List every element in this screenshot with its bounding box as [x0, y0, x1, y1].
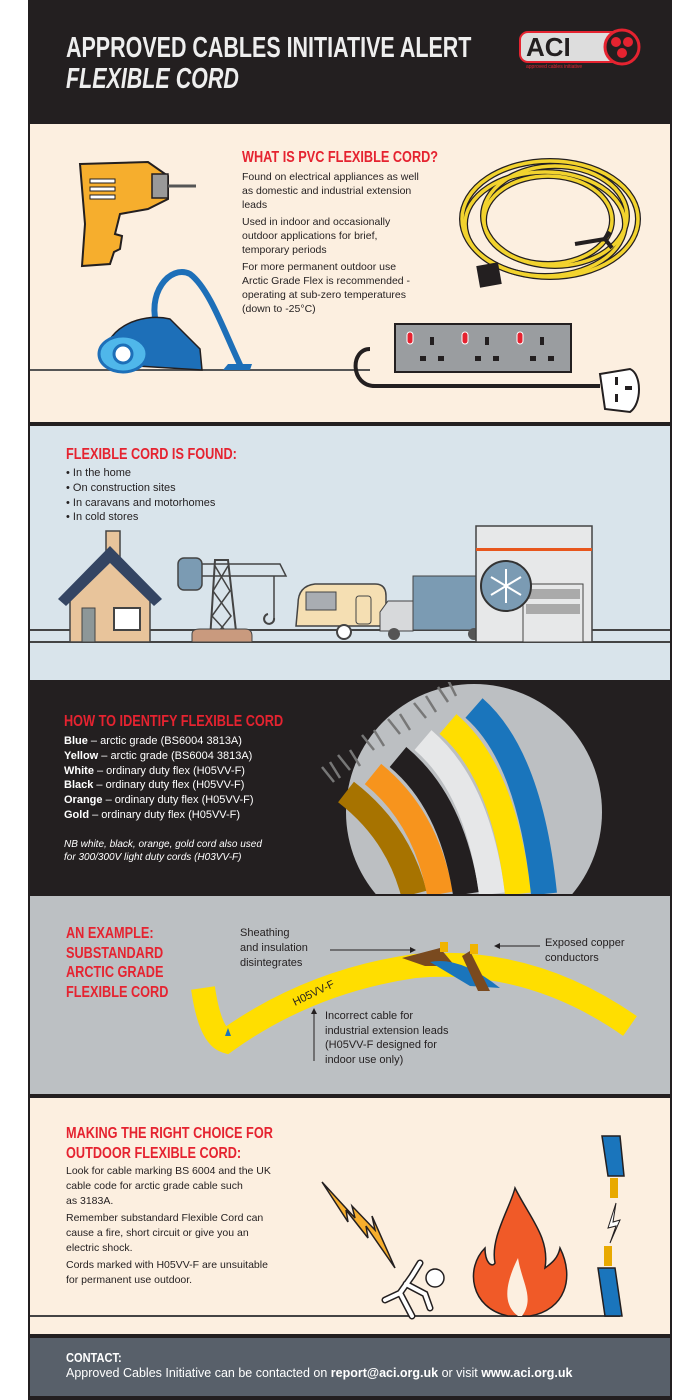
label: incorrect cable: industrial extension leads — [325, 1024, 449, 1036]
label: incorrect cable: indoor use only) — [325, 1054, 403, 1066]
header — [28, 0, 672, 122]
body text — [242, 171, 419, 315]
heading: MAKING THE RIGHT CHOICE FOR — [66, 1125, 273, 1142]
icons: shock, fire, cable — [30, 1135, 625, 1320]
heading — [66, 925, 168, 1000]
contact heading: CONTACT: — [66, 1350, 122, 1365]
label: exposed copper: conductors — [545, 952, 599, 964]
label: incorrect cable — [325, 1010, 449, 1066]
panel: what is pvc flexible cord — [28, 122, 672, 424]
note: NB white, black, orange, gold cord also used — [64, 839, 262, 850]
heading: FLEXIBLE CORD IS FOUND: — [66, 446, 237, 463]
title: APPROVED CABLES INITIATIVE ALERT — [66, 32, 471, 64]
body text: as 3183A. Remember substandard Flexible Cord can — [66, 1195, 263, 1224]
illustration: locations — [30, 525, 670, 643]
body text: electric shock. Cords marked with H05VV-F are unsuitable — [66, 1242, 268, 1271]
colour list: Orange – ordinary duty flex (H05VV-F) — [64, 794, 254, 806]
panel: contact — [28, 1336, 672, 1398]
label: sheathing — [240, 927, 308, 969]
label: sheathing: and insulation — [240, 942, 308, 954]
title: FLEXIBLE CORD — [66, 63, 239, 95]
bullet list: • In cold stores — [66, 511, 138, 523]
bullet list: • In caravans and motorhomes — [66, 497, 215, 509]
colour list: Yellow – arctic grade (BS6004 3813A) — [64, 750, 252, 762]
panel: how to identify — [28, 682, 672, 894]
colour list: White – ordinary duty flex (H05VV-F) — [64, 765, 245, 777]
panel: an example — [28, 894, 672, 1096]
body text: Look for cable marking BS 6004 and the UK — [66, 1165, 271, 1177]
body text: temporary periods For more permanent outdoor use — [242, 244, 396, 273]
logo — [519, 28, 640, 70]
body text — [66, 1165, 271, 1286]
illustration: drill, vacuum, coil, extension — [30, 158, 641, 413]
note: for 300/300V light duty cords (H03VV-F) — [64, 852, 242, 863]
bullet list: • On construction sites — [66, 482, 176, 494]
heading: SUBSTANDARD — [66, 944, 163, 962]
label: incorrect cable: (H05VV-F designed for — [325, 1039, 437, 1051]
body text: (down to -25°C) — [242, 303, 316, 315]
body text: Found on electrical appliances as well — [242, 171, 419, 183]
body text: cable code for arctic grade cable such — [66, 1180, 243, 1192]
heading: HOW TO IDENTIFY FLEXIBLE CORD — [64, 713, 283, 730]
logo: approved cables initiative — [526, 64, 582, 70]
logo: ACI — [526, 32, 571, 62]
panel: flexible cord is found — [28, 424, 672, 682]
body text: Arctic Grade Flex is recommended - — [242, 275, 410, 287]
contact text: Approved Cables Initiative can be contacted on report@aci.org.uk or visit www.aci.org.uk — [66, 1366, 572, 1380]
panel: making the right choice — [28, 1096, 672, 1336]
label: sheathing: disintegrates — [240, 957, 302, 969]
body text: cause a fire, short circuit or give you an — [66, 1227, 249, 1239]
colour list: Black – ordinary duty flex (H05VV-F) — [64, 779, 244, 791]
body text: for permanent use outdoor. — [66, 1274, 192, 1286]
body text: outdoor applications for brief, — [242, 230, 377, 242]
body text: operating at sub-zero temperatures — [242, 289, 406, 301]
damaged cord illustration — [191, 942, 637, 1061]
label: exposed copper: Exposed copper — [545, 937, 624, 949]
damaged cord illustration: H05VV-F — [291, 978, 337, 1009]
title — [66, 32, 472, 95]
heading: ARCTIC GRADE — [66, 964, 163, 981]
heading: FLEXIBLE CORD — [66, 984, 168, 1000]
note — [64, 839, 262, 863]
cable colour illustration — [321, 682, 602, 894]
heading — [66, 1125, 273, 1162]
body text: as domestic and industrial extension — [242, 185, 411, 197]
heading: OUTDOOR FLEXIBLE CORD: — [66, 1144, 241, 1162]
bullet list: • In the home — [66, 467, 131, 479]
label: incorrect cable: Incorrect cable for — [325, 1010, 413, 1022]
label: sheathing: Sheathing — [240, 927, 290, 939]
body text: leads Used in indoor and occasionally — [242, 199, 390, 228]
heading: WHAT IS PVC FLEXIBLE CORD? — [242, 149, 438, 166]
label: exposed copper — [545, 937, 624, 964]
colour list — [64, 735, 254, 821]
colour list: Blue – arctic grade (BS6004 3813A) — [64, 735, 242, 747]
bullet list — [66, 467, 215, 523]
heading: AN EXAMPLE: — [66, 925, 154, 942]
colour list: Gold – ordinary duty flex (H05VV-F) — [64, 809, 240, 821]
